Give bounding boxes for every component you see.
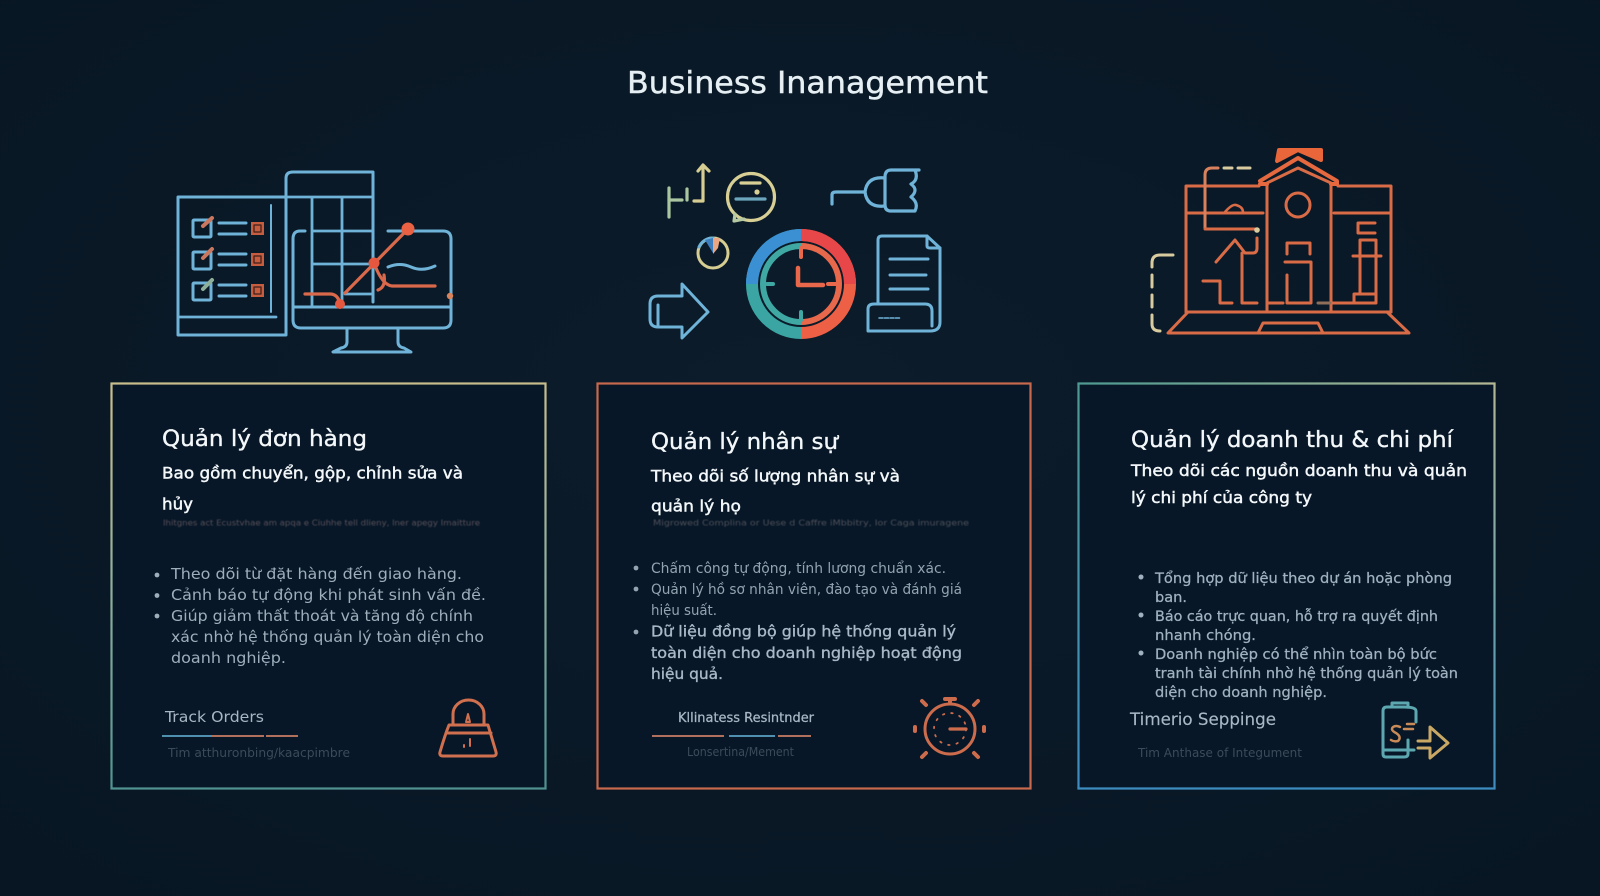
panel border <box>112 384 546 788</box>
bullet list: tranh tài chính nhờ hệ thống quản lý toàn <box>1155 665 1458 682</box>
bullet list <box>155 565 486 667</box>
panel: human resources <box>598 384 1030 788</box>
icon: outline arrow <box>650 284 708 338</box>
icon: building on laptop <box>1152 150 1409 333</box>
bullet list: Quản lý hồ sơ nhân viên, đào tạo và đánh giá <box>651 581 962 598</box>
subheading <box>162 464 463 514</box>
bullet list: nhanh chóng. <box>1155 628 1256 644</box>
bullet list: Dữ liệu đồng bộ giúp hệ thống quản lý <box>651 622 956 640</box>
icon: plug <box>832 170 919 211</box>
icon: phone battery with arrow <box>1383 703 1448 758</box>
subheading: hủy <box>162 494 193 514</box>
panel border <box>1077 384 1496 788</box>
bullet list: hiệu suất. <box>651 603 717 619</box>
icon: clock and workforce symbols <box>650 165 940 338</box>
footer label: Timerio Seppinge <box>1129 710 1276 730</box>
icon: checklist, table and monitor <box>178 172 453 352</box>
bullet list: Giúp giảm thất thoát và tăng độ chính <box>171 607 473 625</box>
bullet list: Chấm công tự động, tính lương chuẩn xác. <box>651 560 946 577</box>
panel: order management <box>112 384 546 788</box>
faint caption: Migrowed Complina or Uese d Caffre iMbbitry, Ior Caga imuragene <box>653 518 969 528</box>
bullet list: doanh nghiệp. <box>171 649 286 667</box>
bullet list <box>1139 570 1458 701</box>
subheading: Theo dõi các nguồn doanh thu và quản <box>1130 461 1467 480</box>
subheading <box>650 466 900 516</box>
bullet list: toàn diện cho doanh nghiệp hoạt động <box>651 644 962 662</box>
bullet list: hiệu quả. <box>651 665 723 683</box>
panel: revenue and expenses <box>1077 384 1496 788</box>
bullet list: diện cho doanh nghiệp. <box>1155 685 1327 701</box>
bullet list: Doanh nghiệp có thể nhìn toàn bộ bức <box>1155 646 1437 663</box>
progress line <box>162 735 298 737</box>
footer caption: Tim Anthase of Integument <box>1137 746 1302 760</box>
subheading: Bao gồm chuyển, gộp, chỉnh sửa và <box>162 464 463 482</box>
bullet list: xác nhờ hệ thống quản lý toàn diện cho <box>171 628 484 646</box>
bullet list: ban. <box>1155 590 1187 606</box>
progress line <box>652 735 811 737</box>
icon: document <box>868 236 940 331</box>
footer caption: Lonsertina/Mement <box>687 745 794 759</box>
bullet list: Tổng hợp dữ liệu theo dự án hoặc phòng <box>1154 570 1452 587</box>
icon: chat bubble <box>728 174 774 221</box>
title: Business Inanagement <box>627 66 988 101</box>
icon: padlock bag <box>440 700 496 756</box>
footer label: Track Orders <box>164 708 264 726</box>
subheading <box>1130 461 1467 507</box>
subheading: quản lý họ <box>651 496 741 516</box>
subheading: lý chi phí của công ty <box>1131 488 1312 507</box>
bullet list: Cảnh báo tự động khi phát sinh vấn đề. <box>171 586 486 604</box>
icon: up arrow step chart <box>669 165 709 217</box>
heading: Quản lý đơn hàng <box>162 427 367 452</box>
heading: Quản lý nhân sự <box>651 430 839 455</box>
heading: Quản lý doanh thu & chi phí <box>1131 428 1454 453</box>
icon: stopwatch <box>915 699 984 757</box>
icon: small pie <box>698 238 728 268</box>
panel border <box>598 384 1030 788</box>
bullet list: Theo dõi từ đặt hàng đến giao hàng. <box>170 565 462 583</box>
subheading: Theo dõi số lượng nhân sự và <box>650 466 900 486</box>
footer label: Kllinatess Resintnder <box>678 711 815 726</box>
icon: main clock <box>752 235 850 333</box>
bullet list <box>634 560 962 683</box>
bullet list: Báo cáo trực quan, hỗ trợ ra quyết định <box>1155 608 1438 625</box>
footer caption: Tim atthuronbing/kaacpimbre <box>167 746 350 760</box>
faint caption: Ihitgnes act Ecustvhae am apqa e Ciuhhe tell dlieny, lner apegy Imaitture <box>163 518 480 528</box>
